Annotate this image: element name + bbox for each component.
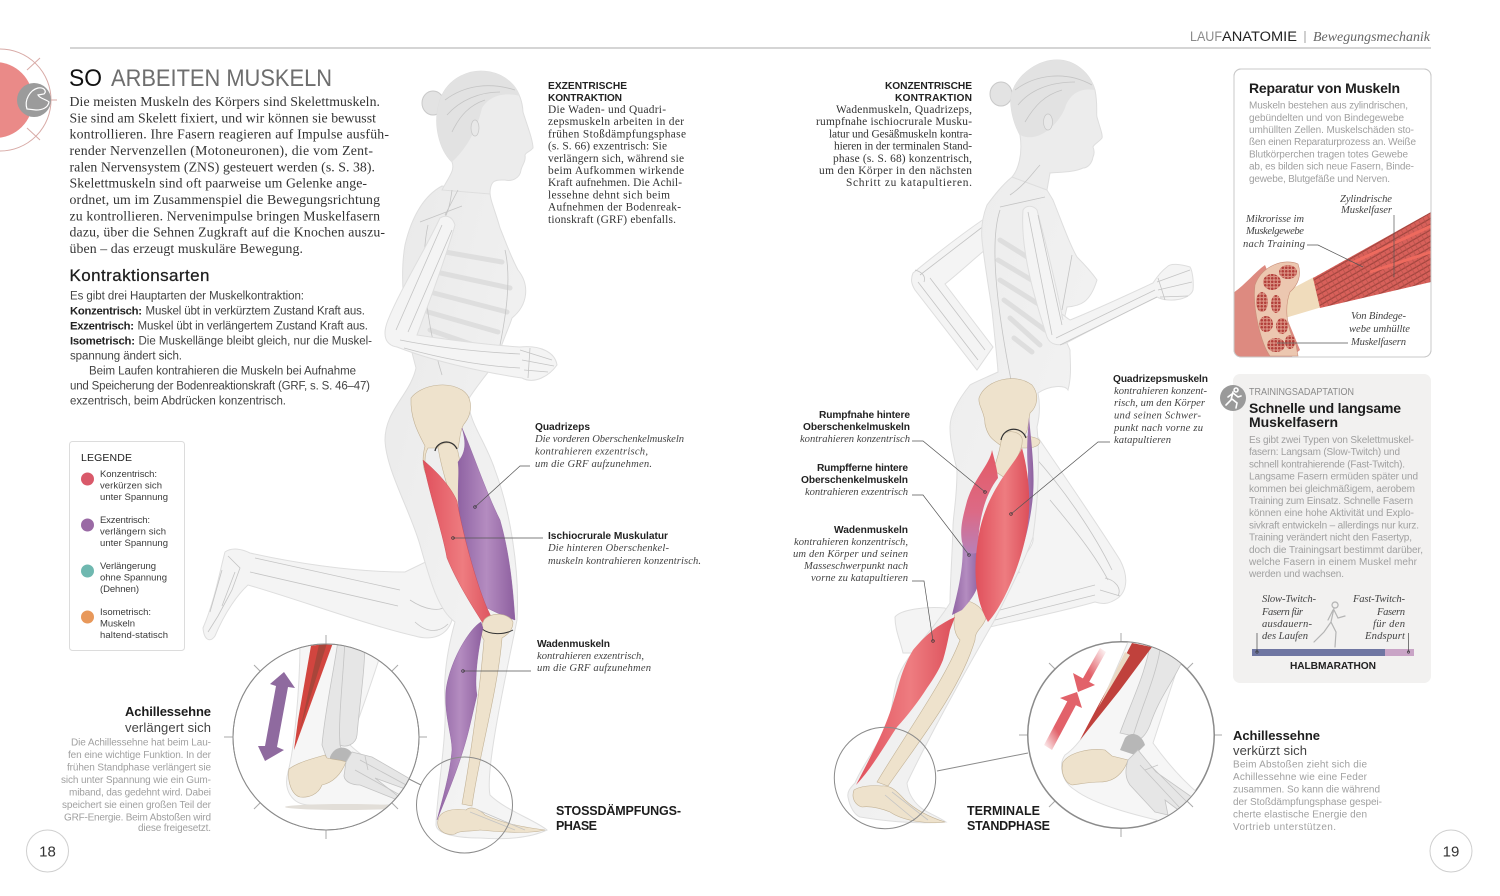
muscle: proximal hamstrings concentric xyxy=(961,450,998,554)
text: eccentric contraction: Kraft aufnehmen. Die Achil- xyxy=(548,177,682,189)
icon: chapter tab with flexed arm xyxy=(0,49,57,151)
text: Achilles tendon left: verlängert sich xyxy=(125,720,211,735)
text: concentric contraction: rumpfnahe ischiocrurale Musku- xyxy=(816,116,972,128)
contraction types text: Exzentrisch: xyxy=(70,320,134,332)
label: quadriceps: Die vorderen Oberschenkelmuskeln xyxy=(534,434,684,445)
legend panel: LEGENDE xyxy=(81,452,132,464)
legend item: lengthening: ohne Spannung xyxy=(100,572,167,584)
figure: runner, shock absorption phase xyxy=(203,71,557,839)
text: eccentric contraction: tionskraft (GRF) ebenfalls. xyxy=(548,214,676,226)
text: Achilles tendon left: frühen Standphase verlängert sie xyxy=(67,762,211,774)
label: slow twitch xyxy=(1261,594,1316,642)
phase label left: STOSSDÄMPFUNGS- xyxy=(556,803,681,818)
text: concentric contraction xyxy=(816,81,972,189)
intro text: kontrollieren. Ihre Fasern reagieren auf Impulse ausfüh- xyxy=(70,127,389,142)
body text: sivkraft entwickeln – allerdings nur kurz. xyxy=(1249,520,1419,531)
text: concentric contraction: hieren in der terminalen Stand- xyxy=(834,141,972,153)
torso and standing leg xyxy=(848,177,1097,823)
arm bones xyxy=(396,225,554,378)
intro text xyxy=(70,94,389,256)
label: quadriceps right: Quadrizepsmuskeln xyxy=(1113,374,1208,385)
label: cylindrical fibre: Muskelfaser xyxy=(1340,205,1393,216)
text: eccentric contraction: Aufnehmen der Bodenreak- xyxy=(548,202,681,214)
text: Achilles tendon right xyxy=(1233,728,1382,833)
text: Achilles tendon right: Achillessehne xyxy=(1233,728,1320,743)
body text: Es gibt zwei Typen von Skelettmuskel- xyxy=(1249,435,1414,446)
body text: Muskeln bestehen aus zylindrischen, xyxy=(1249,100,1408,112)
text: Achilles tendon left: speichert sie einen großen Teil der xyxy=(62,800,212,811)
contraction types text: Die Muskellänge bleibt gleich, nur die Muskel- xyxy=(138,336,372,348)
muscle: hamstrings xyxy=(423,460,495,625)
legend item: isometric xyxy=(81,607,168,641)
panel: fast and slow fibres: HALBMARATHON xyxy=(1290,661,1376,672)
legend item: concentric xyxy=(81,469,168,503)
intro text: Sie sind am Skelett fixiert, und wir können sie bewusst xyxy=(70,110,376,125)
body text: welche Fasern in einem Muskel mehr xyxy=(1248,557,1418,568)
panel: fast and slow fibres xyxy=(1220,374,1431,683)
label: cylindrical fibre: Zylindrische xyxy=(1340,194,1392,205)
text: eccentric contraction: Die Waden- und Quadri- xyxy=(548,104,666,116)
contraction types text: spannung ändert sich. xyxy=(70,350,182,362)
label: cylindrical fibre xyxy=(1340,194,1394,277)
text: eccentric contraction: lessehne dehnt sich beim xyxy=(548,189,670,201)
label: hamstrings: muskeln kontrahieren konzentrisch. xyxy=(548,556,701,567)
knee bones xyxy=(877,600,986,786)
rear leg bones xyxy=(208,556,448,632)
body text: schnell kontrahierende (Fast-Twitch). xyxy=(1249,459,1405,470)
title: Reparatur von Muskeln xyxy=(1249,80,1400,96)
text: concentric contraction: um den Körper in den nächsten xyxy=(819,165,972,177)
front arm xyxy=(385,216,557,380)
tibia and knee xyxy=(462,614,513,806)
text: Achilles tendon left: miband, das gedehnt wird. Dabei xyxy=(69,788,211,798)
label: calf muscles right: Masseschwerpunkt nach xyxy=(803,561,908,572)
pelvis xyxy=(979,379,1040,448)
label: quadriceps right: katapultieren xyxy=(1114,435,1171,446)
text: concentric contraction: Wadenmuskeln, Quadrizeps, xyxy=(836,104,972,116)
page number 19: 19 xyxy=(1443,844,1459,860)
text: concentric contraction: phase (s. S. 68) konzentrisch, xyxy=(833,153,972,165)
rib cage and shoulder bones xyxy=(420,190,510,375)
muscle: quadriceps eccentric xyxy=(458,428,515,620)
text: Achilles tendon left: Achillessehne xyxy=(125,704,211,719)
label: micro tears xyxy=(1243,214,1363,267)
label: calf muscles right: vorne zu katapultieren xyxy=(811,573,908,584)
legend item: isometric: Muskeln xyxy=(100,618,135,630)
phase label right: TERMINALE xyxy=(967,804,1040,818)
text: concentric contraction: Schritt zu katapultieren. xyxy=(846,177,972,189)
legend item: concentric: verkürzen sich xyxy=(100,480,162,492)
body text: Langsame Fasern ermüden später und xyxy=(1249,472,1418,483)
intro text: üben – das erzeugt muskuläre Bewegung. xyxy=(70,241,303,256)
text: Achilles tendon left: sich unter Spannung wie ein Gum- xyxy=(61,775,211,786)
muscle: distal hamstrings eccentric xyxy=(952,535,980,615)
label: fast twitch: Endspurt xyxy=(1364,631,1406,642)
text: concentric contraction: latur und Gesäßmuskeln kontra- xyxy=(829,128,972,140)
title: SO xyxy=(69,65,102,92)
muscle: front strip purple xyxy=(1012,417,1034,570)
label: sheathed fibres: Muskelfasern xyxy=(1350,337,1406,348)
label: quadriceps: um die GRF aufzunehmen. xyxy=(535,459,652,470)
foot bones xyxy=(438,808,545,834)
label: calf muscles right: kontrahieren konzentrisch, xyxy=(794,537,908,548)
label: fast twitch: Fasern xyxy=(1376,607,1405,618)
body text: gebündelten und von Bindegewebe xyxy=(1249,113,1404,124)
text: eccentric contraction: KONTRAKTION xyxy=(548,93,622,104)
title: Muskelfasern xyxy=(1249,414,1338,430)
label: hamstrings: Ischiocrurale Muskulatur xyxy=(548,531,668,542)
rear leg xyxy=(203,549,452,640)
legend item: isometric: Isometrisch: xyxy=(100,607,151,618)
page header: Bewegungsmechanik xyxy=(1313,29,1431,44)
heading: Kontraktionsarten: Kontraktionsarten xyxy=(70,266,210,285)
legend item: lengthening: Verlängerung xyxy=(100,561,156,572)
label: distal hamstrings: kontrahieren exzentrisch xyxy=(805,487,908,498)
label: fast twitch: Fast-Twitch- xyxy=(1352,594,1405,605)
intro text: ordnet, um im Zusammenspiel die Bewegungsrichtung xyxy=(70,192,380,207)
body text: werden und wachsen. xyxy=(1248,569,1344,580)
muscle: calf concentric xyxy=(856,617,955,785)
intro text: ralen Nervensystem (ZNS) gesteuert werden (s. S. 38). xyxy=(70,159,375,175)
femur head xyxy=(993,432,1022,480)
label: hamstrings: Die hinteren Oberschenkel- xyxy=(547,543,669,554)
body text: umhüllten Zellen. Muskelschäden sto- xyxy=(1249,125,1414,136)
phase label left xyxy=(556,803,681,833)
legend item: concentric: Konzentrisch: xyxy=(100,469,157,480)
inset circle: Achilles tendon shortens xyxy=(1019,633,1222,837)
intro text: Skelettmuskeln sind oft paarweise um Gelenke ange- xyxy=(70,176,367,191)
label: distal hamstrings: Rumpfferne hintere xyxy=(817,463,908,474)
label: fast twitch xyxy=(1352,594,1406,642)
label: fast twitch: für den xyxy=(1373,619,1405,630)
panel: muscle repair xyxy=(1233,69,1431,358)
legend item: concentric: unter Spannung xyxy=(100,492,168,503)
body text: doch die Trainingsart bestimmt darüber, xyxy=(1249,545,1423,556)
text: Achilles tendon left xyxy=(61,704,212,834)
legend item: eccentric: verlängern sich xyxy=(100,526,166,538)
torso and standing leg xyxy=(385,186,547,839)
label: calf muscles right: Wadenmuskeln xyxy=(834,525,908,536)
text: concentric contraction: KONZENTRISCHE xyxy=(885,81,972,92)
intro text: render Nervenzellen (Motoneuronen), die vom Zent- xyxy=(70,143,373,159)
label: calf muscles left: kontrahieren exzentrisch, xyxy=(537,651,644,662)
body text: ab, es bilden sich neue Fasern, Binde- xyxy=(1249,162,1414,172)
page header xyxy=(70,29,1431,48)
text: Achilles tendon right: Vortrieb unterstützen. xyxy=(1233,822,1336,833)
figure: runner, terminal stance phase xyxy=(848,60,1193,823)
text: Achilles tendon right: verkürzt sich xyxy=(1233,743,1307,758)
label: micro tears: Muskelgewebe xyxy=(1245,226,1304,237)
panel: fast and slow fibres: TRAININGSADAPTATION xyxy=(1249,387,1354,398)
label: micro tears: nach Training xyxy=(1243,239,1305,250)
arm bones xyxy=(1028,212,1192,345)
label: proximal hamstrings: Oberschenkelmuskeln xyxy=(803,422,910,433)
illustration: muscle fibre xyxy=(1233,212,1431,358)
label: proximal hamstrings: kontrahieren konzentrisch xyxy=(800,434,910,445)
label: distal hamstrings: Oberschenkelmuskeln xyxy=(801,475,908,486)
contraction types text: exzentrisch, beim Abdrücken konzentrisch. xyxy=(70,396,286,408)
muscle: quadriceps concentric xyxy=(975,448,1029,622)
page number 19 xyxy=(1430,830,1472,872)
phase label left: PHASE xyxy=(556,819,597,833)
title: ARBEITEN MUSKELN xyxy=(111,65,332,92)
femur head and shaft xyxy=(438,443,480,530)
text: Achilles tendon left: fen eine wichtige Funktion. In der xyxy=(68,750,212,761)
text: Achilles tendon left: GRF-Energie. Beim Abstoßen wird xyxy=(64,812,211,824)
swing leg bones xyxy=(995,455,1120,620)
label: quadriceps right xyxy=(1010,374,1208,515)
label: calf muscles right xyxy=(793,525,934,642)
pelvis xyxy=(411,385,471,478)
rib cage and shoulder bones xyxy=(995,165,1072,385)
contraction types text: Muskel übt in verkürztem Zustand Kraft aus. xyxy=(146,306,365,318)
icon: sketched runner xyxy=(1314,602,1345,647)
page header: ANATOMIE xyxy=(1222,29,1297,44)
head xyxy=(990,60,1102,190)
text: concentric contraction: KONTRAKTION xyxy=(895,93,972,104)
text: eccentric contraction: EXZENTRISCHE xyxy=(548,81,627,92)
icon: runner badge xyxy=(1220,385,1246,411)
label: sheathed fibres: Von Bindege- xyxy=(1351,311,1406,322)
text: eccentric contraction xyxy=(548,81,686,226)
arrow: double purple xyxy=(258,672,295,761)
body text: kommen bei gleichmäßigem, aerobem xyxy=(1249,484,1415,495)
text: eccentric contraction: frühen Stoßdämpfungsphase xyxy=(548,128,686,140)
text: Achilles tendon left: Die Achillessehne hat beim Lau- xyxy=(71,738,211,748)
text: eccentric contraction: beim Aufkommen wirkende xyxy=(548,165,684,177)
contraction types text: Beim Laufen kontrahieren die Muskeln bei Aufnahme xyxy=(89,366,356,378)
label: slow twitch: ausdauern- xyxy=(1262,619,1312,630)
label: quadriceps right: risch, um den Körper xyxy=(1114,398,1206,409)
rear arm xyxy=(912,217,993,370)
locator circle right xyxy=(834,727,1028,829)
legend panel xyxy=(70,442,184,650)
contraction types text: Es gibt drei Hauptarten der Muskelkontraktion: xyxy=(70,290,304,302)
title xyxy=(1249,400,1401,430)
text: Achilles tendon right: der Stoßdämpfungsphase gespei- xyxy=(1233,797,1382,808)
label: proximal hamstrings xyxy=(800,410,986,493)
label: quadriceps right: punkt nach vorne zu xyxy=(1113,423,1203,434)
text: Achilles tendon right: zusammen. So kann die während xyxy=(1233,784,1380,796)
body text: Training zum Einsatz. Schnelle Fasern xyxy=(1249,496,1413,507)
body text xyxy=(1249,100,1416,185)
label: quadriceps right: und seinen Schwer- xyxy=(1114,410,1201,422)
body text: können eine hohe Aktivität und Explo- xyxy=(1249,508,1414,519)
contraction types text xyxy=(70,290,372,408)
label: quadriceps xyxy=(474,422,684,508)
intro text: dazu, über die Sehnen Zugkraft auf die Knochen auszu- xyxy=(70,225,385,240)
label: hamstrings xyxy=(452,531,701,567)
text: Achilles tendon right: Achillessehne wie eine Feder xyxy=(1233,772,1368,783)
contraction types text: Konzentrisch: xyxy=(70,306,142,318)
label: quadriceps: Quadrizeps xyxy=(535,422,590,433)
label: slow twitch: Fasern für xyxy=(1261,607,1304,618)
legend item: lengthening xyxy=(81,561,167,595)
body text: fasern: Langsam (Slow-Twitch) und xyxy=(1249,447,1400,458)
label: slow twitch: des Laufen xyxy=(1262,631,1308,642)
legend item: isometric: haltend-statisch xyxy=(100,630,168,641)
legend item: eccentric xyxy=(81,515,168,549)
legend item: lengthening: (Dehnen) xyxy=(100,584,139,595)
label: proximal hamstrings: Rumpfnahe hintere xyxy=(819,410,910,421)
label: sheathed fibres: webe umhüllte xyxy=(1349,324,1410,335)
label: quadriceps right: kontrahieren konzent- xyxy=(1114,386,1207,397)
head xyxy=(422,71,533,194)
intro text: zu kontrollieren. Nervenimpulse bringen Muskelfasern xyxy=(70,208,380,223)
label: calf muscles left: Wadenmuskeln xyxy=(537,639,610,650)
phase label right xyxy=(967,804,1050,833)
text: Achilles tendon right: cherte elastische Energie den xyxy=(1233,810,1367,820)
swing thigh and shin xyxy=(975,430,1126,627)
body text xyxy=(1248,435,1423,580)
text: eccentric contraction: zepsmuskeln arbeiten in der xyxy=(548,116,684,128)
label: sheathed fibres xyxy=(1277,311,1410,348)
body text: gewebe, Blutgefäße und Nerven. xyxy=(1249,174,1390,185)
label: calf muscles left: um die GRF aufzunehmen xyxy=(537,663,651,674)
contraction types text: Isometrisch: xyxy=(70,336,135,348)
legend item: eccentric: Exzentrisch: xyxy=(100,515,150,526)
front arm xyxy=(1023,206,1193,345)
arrow: red opposing arrows xyxy=(1044,648,1106,750)
rear foot xyxy=(895,607,965,653)
muscle: calf eccentric xyxy=(437,622,483,820)
label: calf muscles left xyxy=(462,639,651,674)
body text: Blutkörperchen tragen totes Gewebe xyxy=(1249,150,1408,160)
label: distal hamstrings xyxy=(801,463,970,556)
body text: ßen einen Reparaturprozess an. Weiße xyxy=(1249,137,1416,148)
phase label right: STANDPHASE xyxy=(967,819,1050,833)
body text: Training verändert nicht den Fasertyp, xyxy=(1249,533,1412,544)
page number 18 xyxy=(26,830,68,872)
label: slow twitch: Slow-Twitch- xyxy=(1262,594,1316,605)
contraction types text: Muskel übt in verlängertem Zustand Kraft aus. xyxy=(138,320,368,332)
text: Achilles tendon left: diese freigesetzt. xyxy=(138,823,211,834)
page header: LAUF xyxy=(1190,29,1222,44)
contraction types text: und Speicherung der Bodenreaktionskraft (GRF, s. S. 46–47) xyxy=(70,380,370,392)
legend item: eccentric: unter Spannung xyxy=(100,538,168,549)
text: eccentric contraction: (s. S. 66) exzentrisch: Sie xyxy=(548,141,667,153)
text: Achilles tendon right: Beim Abstoßen zieht sich die xyxy=(1233,760,1367,770)
race distribution bar xyxy=(1252,633,1414,656)
page number 18: 18 xyxy=(39,844,56,860)
locator circle left xyxy=(409,757,512,853)
label: calf muscles right: um den Körper und seinen xyxy=(793,549,908,560)
intro text: Die meisten Muskeln des Körpers sind Skelettmuskeln. xyxy=(70,94,380,109)
label: micro tears: Mikrorisse im xyxy=(1245,214,1304,225)
label: quadriceps: kontrahieren exzentrisch, xyxy=(535,446,648,458)
text: eccentric contraction: verlängern sich, während sie xyxy=(548,153,684,165)
inset circle: Achilles tendon lengthens xyxy=(224,635,427,839)
title: Schnelle und langsame xyxy=(1249,400,1401,416)
foot bones xyxy=(853,786,945,823)
